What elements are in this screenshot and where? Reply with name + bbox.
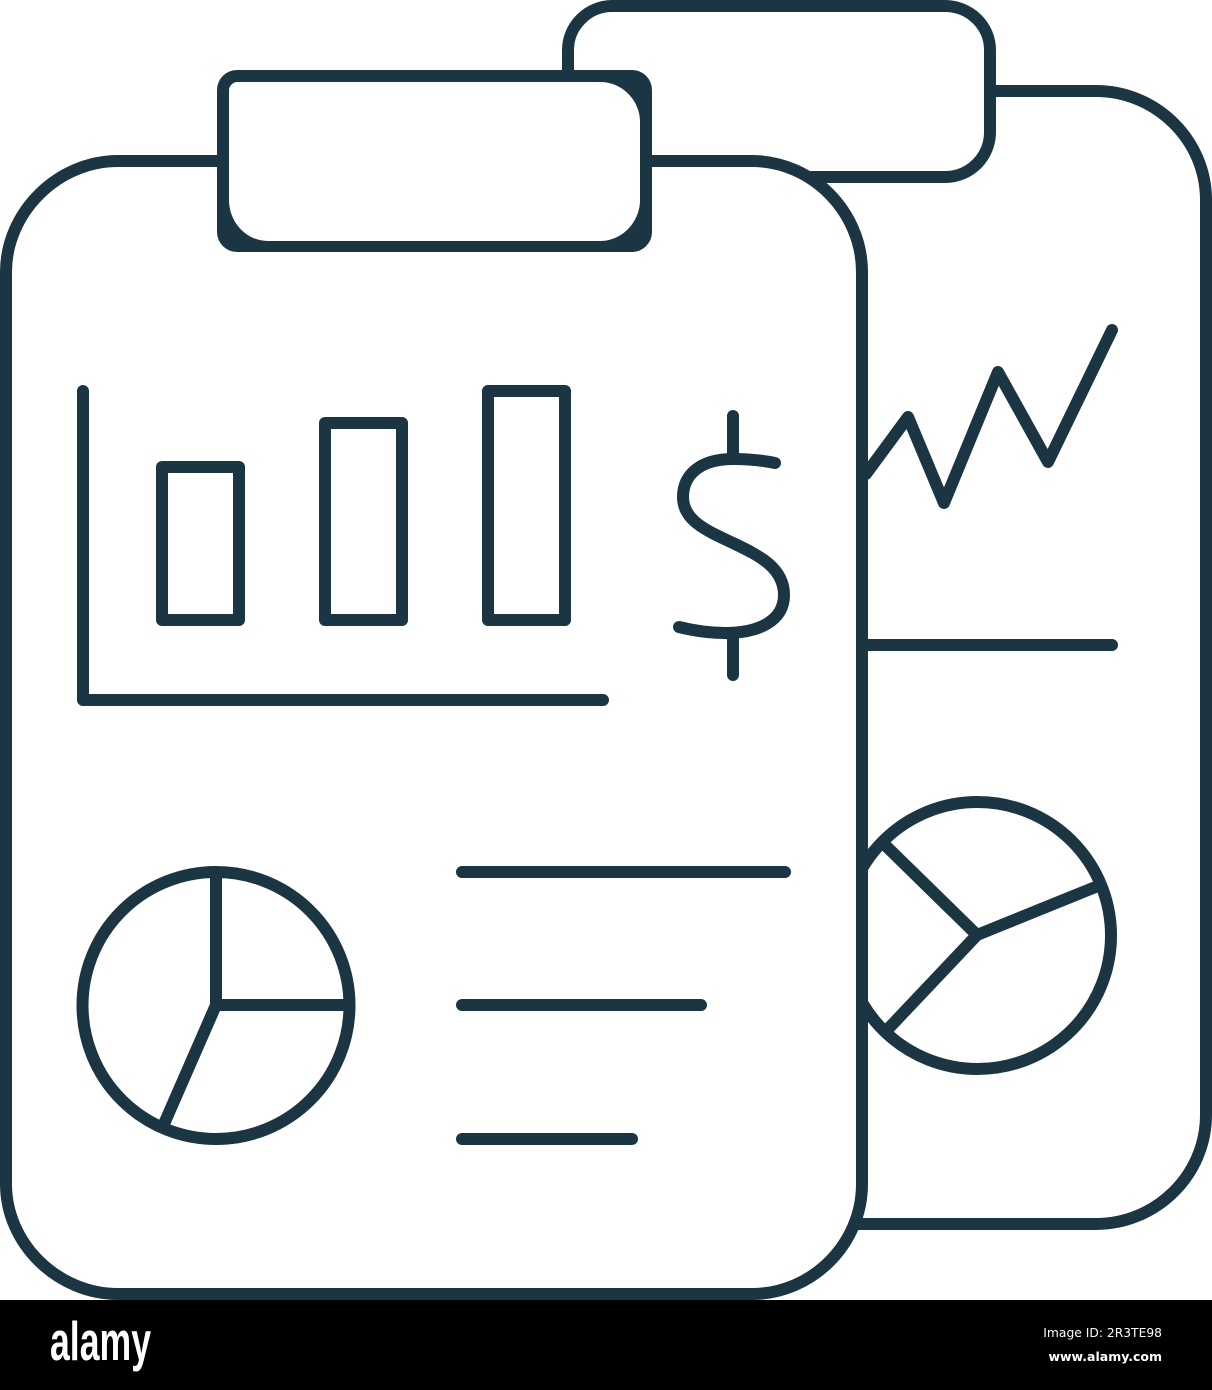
back clipboard	[568, 6, 1206, 1224]
bar chart axes	[83, 391, 603, 700]
front pie chart	[82, 872, 350, 1139]
back divider line	[866, 639, 1112, 651]
icon: dollar sign	[679, 416, 784, 675]
line chart	[866, 330, 1112, 503]
back clipboard body	[850, 91, 1206, 1224]
front clipboard clip	[217, 70, 652, 252]
front clipboard body	[6, 161, 862, 1294]
footer url: www.alamy.com	[1048, 1349, 1162, 1364]
footer logo: alamy	[50, 1310, 151, 1372]
text line 2	[462, 999, 701, 1011]
text line 1	[462, 866, 785, 878]
bar 2	[325, 423, 402, 620]
footer bar	[0, 1300, 1212, 1390]
back pie chart	[844, 802, 1111, 1069]
image id: Image ID: 2R3TE98	[1043, 1326, 1162, 1340]
text line 3	[462, 1133, 632, 1145]
bar 1	[162, 467, 239, 620]
front clipboard	[6, 70, 862, 1294]
back clipboard clip	[568, 6, 990, 177]
bar 3	[488, 391, 565, 620]
